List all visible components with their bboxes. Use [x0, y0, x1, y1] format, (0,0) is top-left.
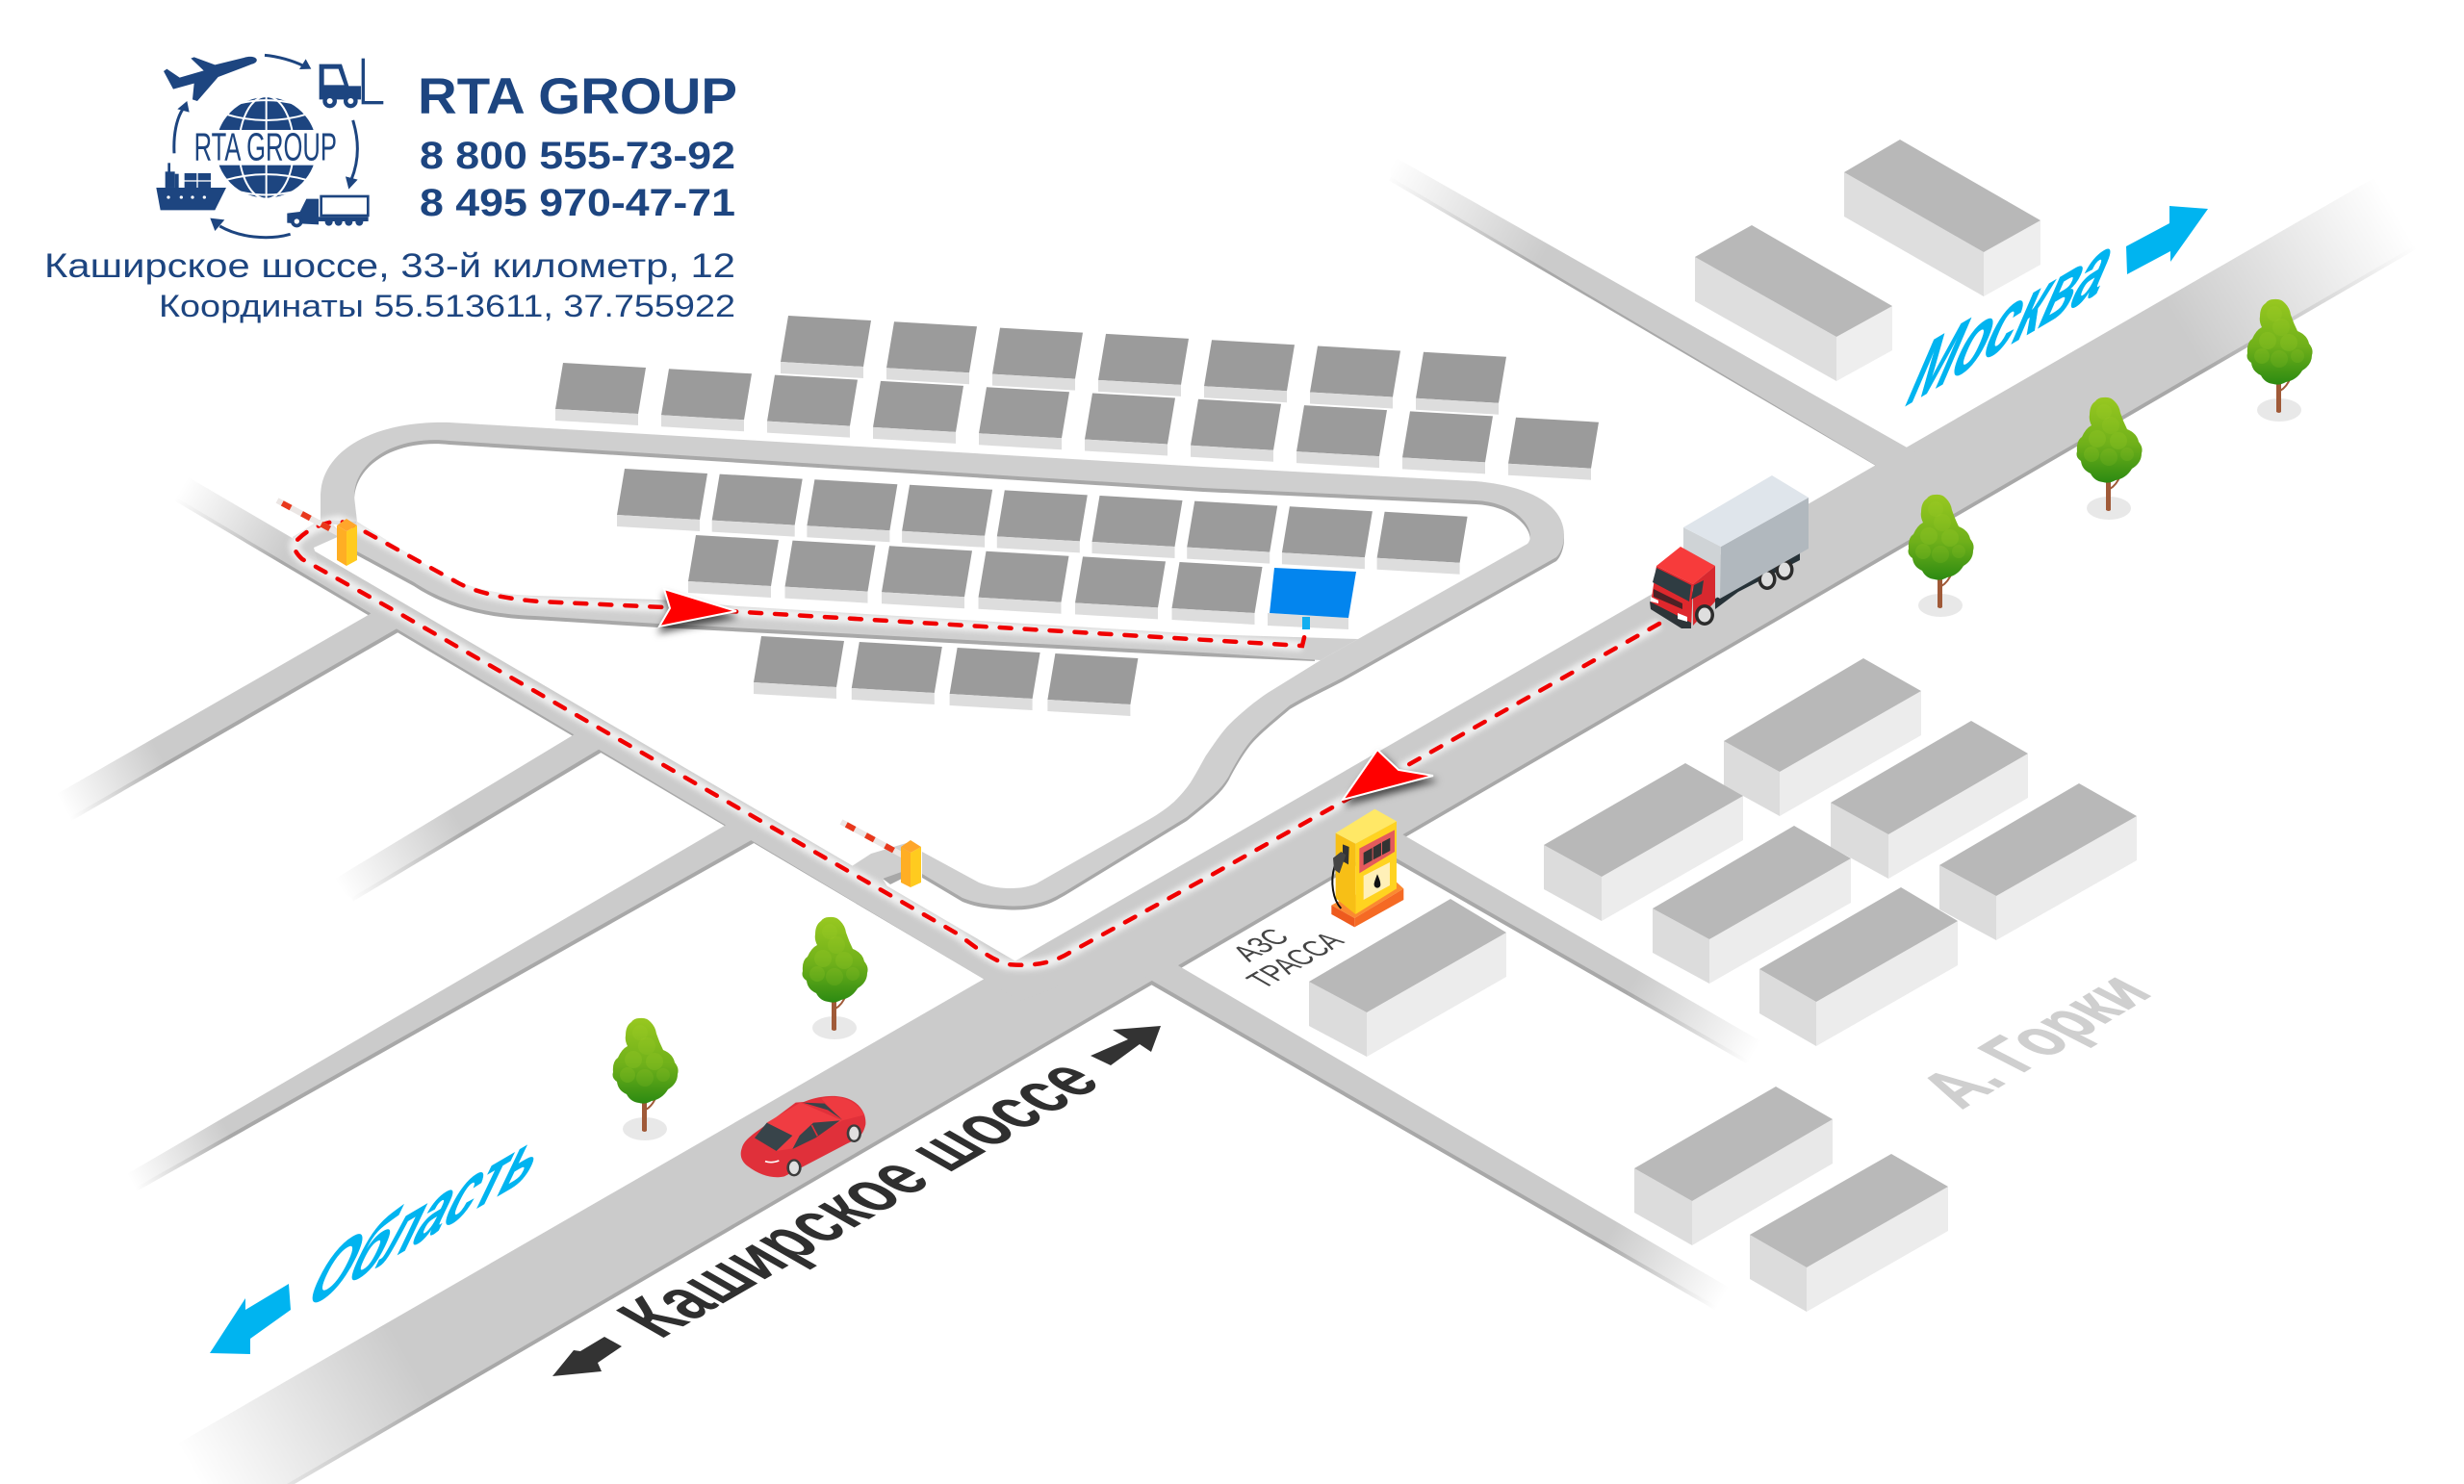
warehouse row 2 — [555, 363, 1599, 480]
building: cluster 1 — [1724, 658, 1921, 816]
coordinates: Координаты 55.513611, 37.755922 — [159, 289, 735, 323]
building: cluster 2 — [1831, 721, 2028, 879]
depot ring road and alley — [293, 422, 1564, 909]
logo text: RTA GROUP — [194, 125, 337, 169]
building: cluster 5 — [1653, 826, 1851, 984]
label: Москва: Москва — [1893, 207, 2134, 429]
logo icon: forklift — [320, 59, 383, 108]
logo — [156, 55, 383, 238]
arrow: to region — [210, 1284, 291, 1354]
phone 2: 8 495 970-47-71 — [420, 182, 735, 224]
arrow: to Moscow — [2126, 206, 2208, 274]
route arrow: inside depot — [659, 589, 736, 627]
highlighted blue warehouse — [1268, 568, 1356, 629]
building: near fuel station — [1309, 899, 1506, 1057]
logo cycle arrows — [174, 55, 358, 238]
logo icon: plane — [164, 57, 257, 101]
icon: tree 5 — [612, 1018, 679, 1140]
icon: tree 4 — [803, 917, 868, 1039]
icon: tree 2 — [2077, 397, 2143, 520]
warehouse row 5 — [754, 636, 1138, 716]
building: north 2 — [1695, 225, 1892, 381]
logo icon: globe — [191, 96, 342, 199]
warehouse row 3 — [617, 469, 1468, 575]
logo icon: ship — [156, 163, 226, 210]
building: north 1 — [1844, 140, 2040, 296]
building: cluster 4 — [1544, 763, 1743, 921]
warehouse row 4 — [688, 535, 1263, 625]
label: ТРАССА: ТРАССА — [1239, 927, 1352, 993]
building: south 1 — [1634, 1087, 1833, 1245]
icon: truck — [1650, 475, 1809, 628]
building: cluster 3 — [1939, 783, 2137, 940]
label: Область: Область — [293, 1100, 564, 1330]
destination marker — [1302, 617, 1310, 629]
address: Каширское шоссе, 33-й километр, 12 — [44, 247, 735, 285]
phone 1: 8 800 555-73-92 — [420, 135, 735, 177]
icon: tree 1 — [2246, 299, 2313, 422]
gate 1 barrier — [277, 500, 357, 566]
label: А. Горки: А. Горки — [1902, 963, 2169, 1117]
icon: red car — [741, 1096, 865, 1177]
building: south 2 — [1750, 1154, 1948, 1312]
label: Каширское шоссе: Каширское шоссе — [599, 1048, 1118, 1348]
route halo — [295, 521, 1659, 965]
route arrow: highway — [1343, 750, 1433, 800]
company name: RTA GROUP — [418, 68, 737, 125]
label: АЗС: АЗС — [1224, 924, 1297, 966]
icon: fuel pump — [1331, 809, 1403, 927]
gate 2 barrier — [841, 822, 921, 887]
icon: tree 3 — [1908, 495, 1974, 617]
arrow: highway left — [552, 1337, 622, 1376]
warehouse row 1 — [781, 316, 1506, 415]
building: cluster 6 — [1759, 887, 1958, 1046]
arrow: highway right — [1091, 1026, 1161, 1065]
dashed route line — [295, 521, 1659, 965]
logo icon: lorry — [287, 196, 369, 227]
